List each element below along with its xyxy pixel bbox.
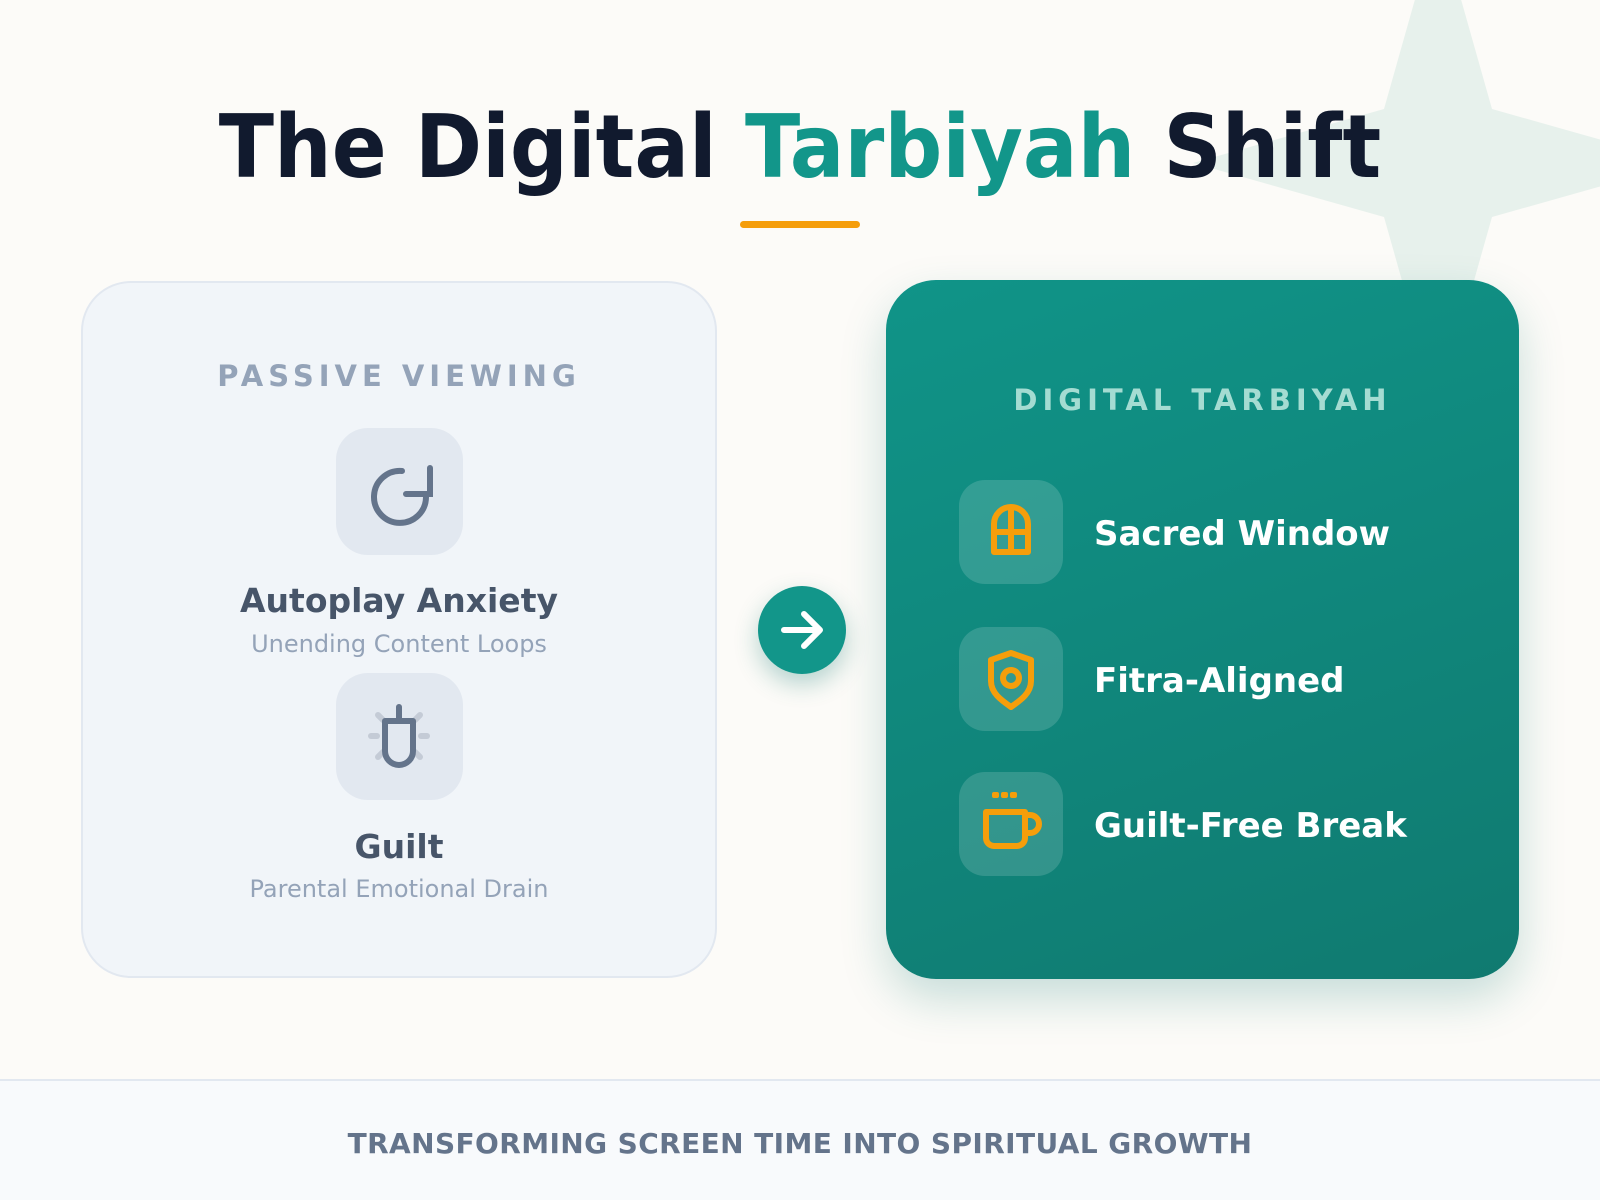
footer tagline: TRANSFORMING SCREEN TIME INTO SPIRITUAL GROWTH [348, 1127, 1252, 1160]
text: guilt: Guilt [354, 827, 443, 866]
icon: shield [959, 627, 1063, 731]
label: Fitra-Aligned [1094, 661, 1345, 701]
item: guilt-free break [959, 772, 1408, 876]
icon: autoplay loop [336, 428, 463, 555]
item: sacred window [959, 480, 1390, 584]
icon: cup [959, 772, 1063, 876]
title underline [740, 221, 860, 228]
icon: window [959, 480, 1063, 584]
text: unending content loops: Unending Content Loops [251, 630, 547, 658]
heading: passive viewing: PASSIVE VIEWING [217, 359, 581, 393]
text: autoplay anxiety: Autoplay Anxiety [240, 581, 558, 620]
icon: guilt alarm [336, 673, 463, 800]
heading: digital tarbiyah: DIGITAL TARBIYAH [1013, 383, 1392, 417]
footer [0, 1079, 1600, 1200]
panel: passive viewing [81, 281, 717, 978]
arrow: transition [758, 586, 846, 674]
title: The Digital Tarbiyah Shift [219, 97, 1381, 199]
text: parental emotional drain: Parental Emotional Drain [250, 875, 548, 903]
label: Guilt-Free Break [1094, 806, 1407, 846]
panel: digital tarbiyah [886, 280, 1519, 979]
label: Sacred Window [1094, 514, 1390, 554]
item: fitra-aligned [959, 627, 1345, 731]
